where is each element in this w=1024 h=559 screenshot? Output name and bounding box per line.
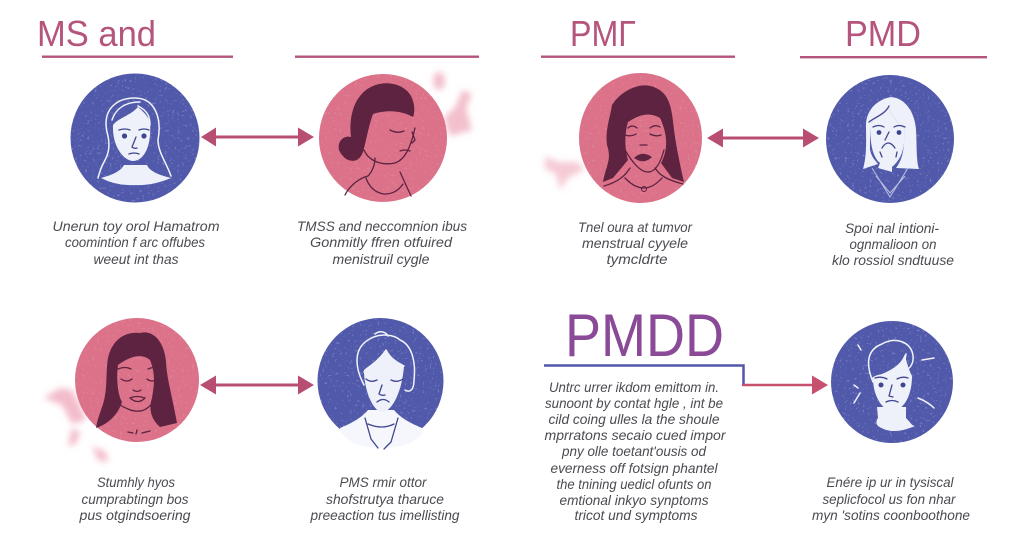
text: PMDD description bbox=[544, 379, 727, 523]
text: column four description: Spoi nal intioni- bbox=[845, 220, 939, 236]
text: column five description: Stumhly hyos bbox=[97, 474, 175, 490]
text: column two description bbox=[297, 218, 467, 267]
text: PMDD description: the tnining uedicl ofunts on bbox=[556, 476, 712, 492]
text: column three description: tymcldrte bbox=[606, 251, 668, 267]
text: column six description bbox=[310, 474, 460, 523]
icon: blue woman frowning bbox=[826, 75, 954, 203]
text: column six description: PMS rmir ottor bbox=[340, 474, 428, 490]
text: column one description: Unerun toy orol Hamatrom bbox=[52, 218, 220, 234]
text: column eight description: myn 'sotins coonboothone bbox=[812, 507, 970, 523]
heading: MS and: MS and bbox=[37, 13, 156, 54]
heading: PMD: PMD bbox=[845, 13, 921, 54]
text: column six description: preeaction tus imellisting bbox=[310, 507, 460, 523]
text: PMDD description: Untrc urrer ikdom emittom in. bbox=[549, 379, 719, 395]
text: column one description: weeut int thas bbox=[94, 251, 178, 267]
text: column eight description bbox=[812, 474, 970, 523]
heading: PMDD: PMDD bbox=[565, 302, 724, 369]
text: column four description: klo rossiol sndtuuse bbox=[832, 252, 954, 268]
arrow: double between first pair bbox=[201, 128, 314, 146]
smoke: pink cloud right of second circle bbox=[433, 72, 472, 136]
arrow: double between third pair bbox=[200, 376, 314, 394]
text: column one description bbox=[52, 218, 220, 267]
text: column three description: menstrual cyyele bbox=[582, 235, 688, 251]
text: PMDD description: cild coing ulles la the shoule bbox=[548, 411, 720, 427]
icon: blue person with tension marks bbox=[831, 321, 953, 443]
smoke: pink cloud left of fifth circle bbox=[44, 388, 108, 462]
text: PMDD description: sunoont by contat hgle , int be bbox=[545, 395, 723, 411]
text: column five description: pus otgindsoering bbox=[78, 507, 191, 523]
icon: blue person sad bbox=[318, 318, 444, 449]
connector: PMDD rule to arrow bbox=[544, 366, 828, 394]
text: column eight description: Enére ip ur in tysiscal bbox=[826, 474, 954, 490]
text: PMDD description: mprratons secaio cued impor bbox=[544, 427, 727, 443]
text: column three description bbox=[578, 219, 693, 267]
smoke: pink cloud left of third circle bbox=[544, 156, 584, 190]
text: column three description: Tnel oura at tumvor bbox=[578, 219, 693, 235]
text: column four description: ognmalioon on bbox=[850, 236, 937, 252]
text: column five description: cumprabtingn bos bbox=[82, 491, 188, 507]
text: column two description: TMSS and neccomnion ibus bbox=[297, 218, 467, 234]
text: column four description bbox=[832, 220, 954, 268]
arrow: double between second pair bbox=[707, 128, 819, 148]
icon: pink woman pained bbox=[579, 73, 702, 203]
text: PMDD description: tricot und symptoms bbox=[574, 507, 698, 523]
icon: pink woman with bun bbox=[319, 74, 447, 202]
icon: blue woman neutral bbox=[70, 74, 200, 202]
heading: PMI: PMΓ bbox=[570, 13, 636, 54]
text: column two description: menistruil cygle bbox=[332, 251, 430, 267]
text: PMDD description: pny olle toetant'ousis od bbox=[561, 443, 707, 459]
icon: pink woman eyes closed bbox=[75, 318, 199, 442]
text: PMDD description: emtional inkyo synptoms bbox=[560, 492, 708, 508]
text: PMDD description: everness off fotsign phantel bbox=[550, 460, 718, 476]
text: column five description bbox=[78, 474, 191, 523]
text: column six description: shofstrutya tharuce bbox=[326, 491, 444, 507]
text: column two description: Gonmitly ffren otfuired bbox=[310, 234, 453, 250]
heading rule: second column bbox=[295, 56, 479, 58]
text: column one description: coomintion f arc offubes bbox=[65, 234, 205, 250]
text: column eight description: seplicfocol us fon nhar bbox=[822, 491, 957, 507]
